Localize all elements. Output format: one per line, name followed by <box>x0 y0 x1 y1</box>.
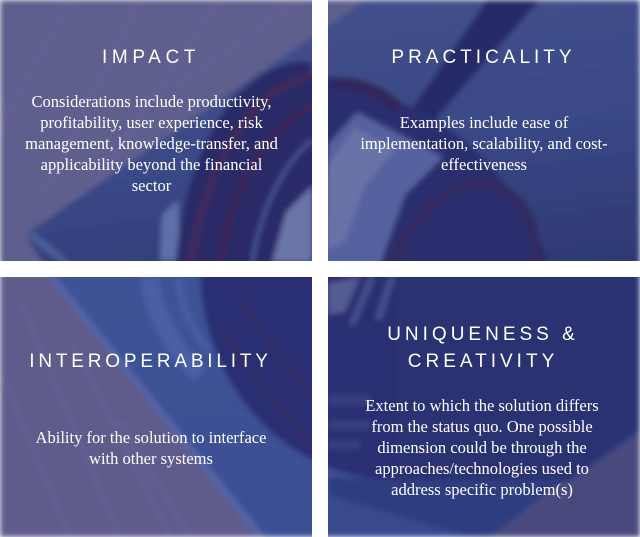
white gutters <box>312 0 328 537</box>
text: uniqueness description <box>365 396 599 499</box>
text: interoperability description <box>36 428 266 468</box>
text: uniqueness description: approaches/technologies used to <box>375 459 589 478</box>
heading: uniqueness and creativity: CREATIVITY <box>408 350 558 372</box>
text: impact description: sector <box>132 176 171 195</box>
heading: interoperability: INTEROPERABILITY <box>29 351 272 372</box>
heading: practicality: PRACTICALITY <box>391 47 576 68</box>
text: practicality description: effectiveness <box>441 154 527 174</box>
text: impact description <box>25 92 278 195</box>
text: practicality description: Examples include ease of <box>400 112 568 132</box>
text: impact description: profitability, user experience, risk <box>40 113 263 132</box>
text: uniqueness description: dimension could be through the <box>377 438 587 457</box>
text: uniqueness description: from the status quo. One possible <box>371 417 593 436</box>
lower scene <box>0 277 640 537</box>
text: uniqueness description: address specific problem(s) <box>391 480 573 499</box>
heading: uniqueness and creativity <box>387 324 579 372</box>
text: uniqueness description: Extent to which the solution differs <box>365 396 599 415</box>
heading: impact: IMPACT <box>102 47 200 68</box>
text: impact description: applicability beyond the financial <box>41 155 262 174</box>
text: impact description: management, knowledge-transfer, and <box>25 134 278 153</box>
text: impact description: Considerations include productivity, <box>32 92 271 111</box>
upper scene <box>0 0 640 290</box>
text: interoperability description: with other systems <box>89 449 213 468</box>
panel: uniqueness and creativity <box>365 324 599 499</box>
text: interoperability description: Ability for the solution to interface <box>36 428 266 447</box>
panel: interoperability <box>29 351 272 468</box>
heading: uniqueness and creativity: UNIQUENESS & <box>387 324 579 345</box>
text: practicality description: implementation, scalability, and cost- <box>360 134 608 152</box>
text: practicality description <box>360 112 608 174</box>
panel: practicality <box>360 47 608 174</box>
panel: impact <box>25 47 278 195</box>
